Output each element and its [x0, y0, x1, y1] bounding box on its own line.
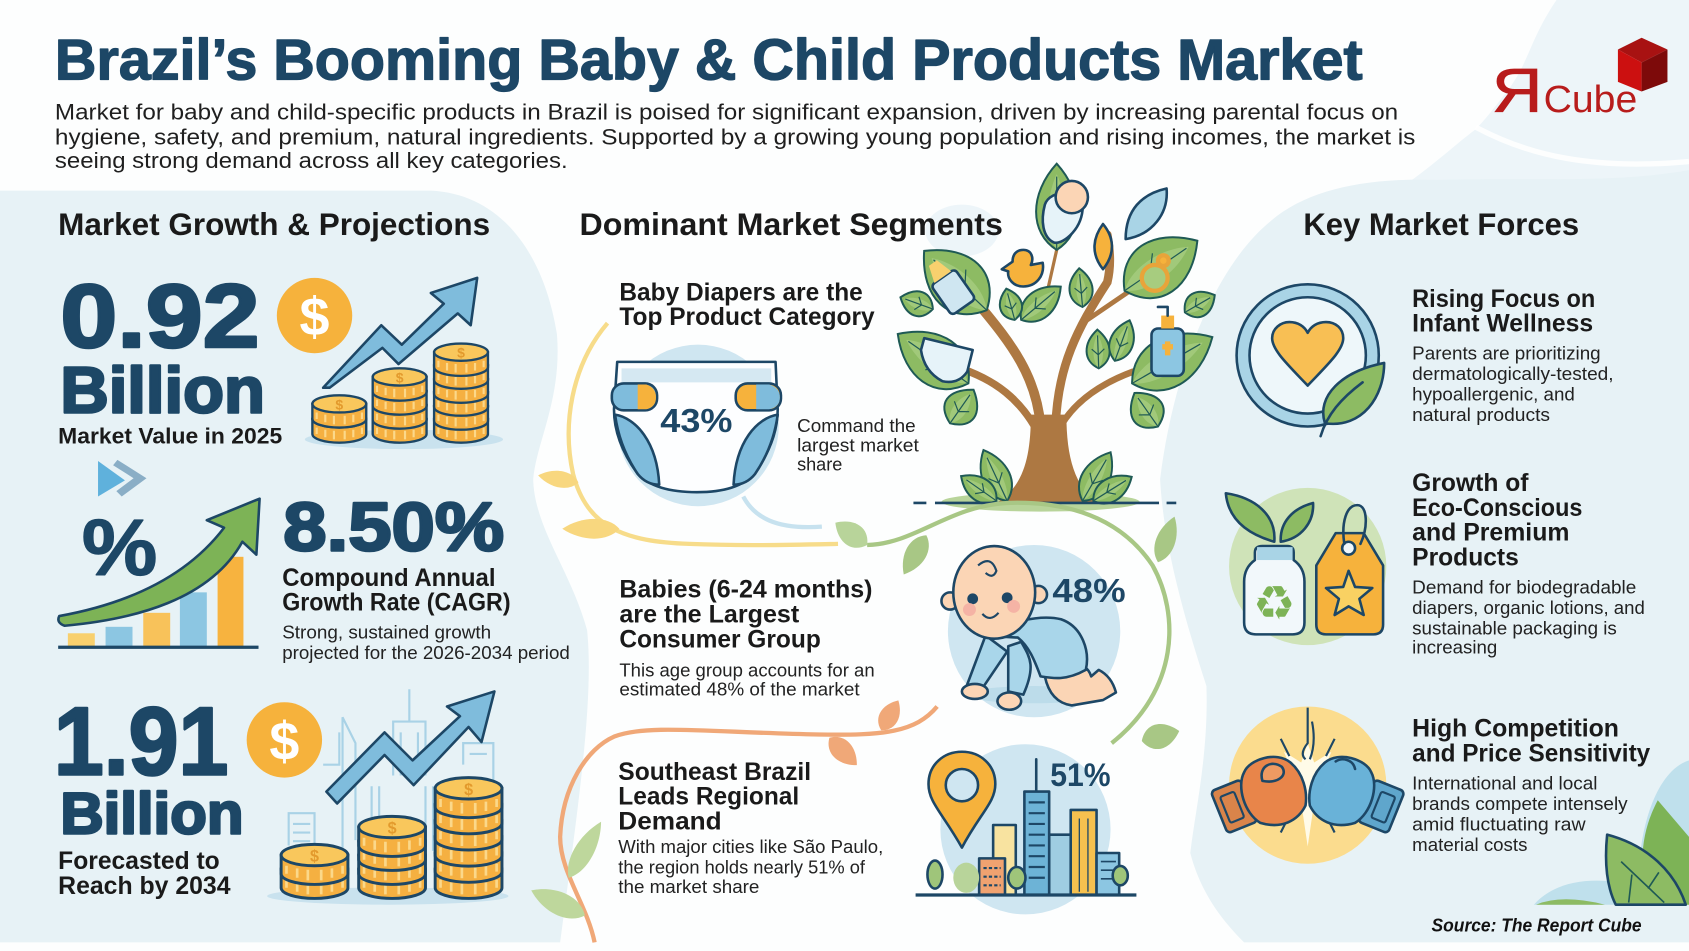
heading: dominant segments: Dominant Market Segments: [580, 207, 1003, 242]
panel: key market forces: [1211, 207, 1689, 905]
text: babies consumer group: are the Largest: [619, 602, 799, 629]
text: baby diapers: Baby Diapers are the: [619, 279, 863, 306]
icon: pacifier: [1142, 255, 1169, 291]
text: baby diapers: [619, 279, 920, 475]
text: eco conscious: sustainable packaging is: [1412, 617, 1617, 638]
stat: 1.91 billion: Forecasted to: [58, 848, 220, 875]
icon: diaper with 43 percent: [612, 345, 781, 506]
text: infant wellness: natural products: [1412, 404, 1550, 425]
text: infant wellness: Parents are prioritizing: [1412, 343, 1601, 364]
stat: CAGR: Strong, sustained growth: [282, 622, 491, 643]
icon: dollar coin: $: [269, 711, 299, 771]
text: eco conscious: Eco-Conscious: [1412, 495, 1582, 522]
icon: small diaper: [921, 338, 973, 382]
panel: market growth and projections: [54, 207, 570, 905]
icon: diaper with 43 percent: 43%: [660, 403, 732, 440]
text: baby diapers: share: [797, 454, 842, 475]
text: babies consumer group: Babies (6-24 months): [619, 577, 873, 604]
text: baby diapers: Command the: [797, 415, 916, 436]
text: eco conscious: and Premium: [1412, 520, 1569, 547]
icon: city, rising arrow and large coin stacks: $: [464, 781, 473, 799]
background: right panel blob: [1160, 170, 1689, 942]
icon: rising arrow and coin stacks: $: [457, 345, 465, 361]
text: eco conscious: [1412, 470, 1645, 658]
intro paragraph: [55, 100, 1415, 173]
background: top right pale blob: [1400, 0, 1689, 188]
icon: city, rising arrow and large coin stacks: [267, 689, 508, 905]
text: infant wellness: Rising Focus on: [1412, 286, 1595, 313]
intro paragraph: hygiene, safety, and premium, natural ingredients. Supported by a growing young population and rising incomes, the market is: [55, 124, 1415, 149]
text: high competition: brands compete intensely: [1412, 793, 1628, 814]
icon: crawling baby with 48 percent: [941, 545, 1126, 717]
text: infant wellness: [1412, 286, 1614, 425]
icon: heart in ring with leaf: [1237, 284, 1384, 436]
text: baby diapers: Top Product Category: [619, 304, 875, 331]
icon: rubber duck: [1002, 250, 1043, 286]
corner foliage: [1534, 760, 1689, 905]
icon: eco bottle and price tag: [1226, 488, 1386, 645]
intro paragraph: seeing strong demand across all key categories.: [55, 148, 568, 173]
pale cloud behind tree: [925, 205, 999, 256]
ground mound: [941, 492, 1140, 512]
text: high competition: High Competition: [1412, 716, 1619, 743]
icon: dollar coin: [277, 278, 352, 353]
text: high competition: International and local: [1412, 772, 1597, 793]
text: eco conscious: Growth of: [1412, 470, 1529, 497]
icon: map pin and city with 51 percent: 51%: [1050, 757, 1111, 793]
stat: 0.92 billion: 0.92: [60, 266, 260, 367]
leaves: [884, 164, 1225, 511]
background: left panel blob: [0, 191, 589, 942]
intro paragraph: Market for baby and child-specific products in Brazil is poised for significant expansion, driven by increasing parental focus on: [55, 100, 1398, 125]
text: babies consumer group: This age group accounts for an: [619, 659, 875, 680]
text: infant wellness: hypoallergenic, and: [1412, 384, 1575, 405]
stat: 0.92 billion: Market Value in 2025: [58, 424, 282, 449]
text: southeast brazil: the region holds nearly 51% of: [618, 856, 866, 877]
icon: boxing gloves: [1211, 707, 1405, 864]
icon: city, rising arrow and large coin stacks: $: [388, 820, 397, 838]
icon: percent sign: %: [82, 503, 157, 592]
stat: CAGR: Compound Annual: [282, 565, 495, 592]
chart: CAGR growth bars with arrow: [58, 499, 260, 647]
panel: dominant market segments: [526, 164, 1225, 942]
text: eco conscious: Demand for biodegradable: [1412, 576, 1636, 597]
title: Brazil’s Booming Baby & Child Products Market: [55, 29, 1363, 93]
stat: 1.91 billion: Reach by 2034: [58, 873, 231, 900]
text: high competition: [1412, 716, 1650, 855]
icon: swaddled baby: [1043, 181, 1088, 243]
stat: CAGR: Growth Rate (CAGR): [282, 590, 511, 617]
text: infant wellness: dermatologically-tested,: [1412, 363, 1614, 384]
icon: double chevron: [98, 460, 146, 497]
text: babies consumer group: estimated 48% of the market: [619, 679, 860, 700]
logo: RCube: [1492, 38, 1667, 126]
text: eco conscious: diapers, organic lotions, and: [1412, 597, 1645, 618]
stat: 1.91 billion: Billion: [60, 782, 243, 847]
stat: 1.91 billion: [54, 686, 243, 900]
text: high competition: amid fluctuating raw: [1412, 813, 1586, 834]
icon: baby bottle: [921, 255, 976, 315]
tree trunk and branches: [969, 235, 1133, 503]
ground line: [913, 502, 1176, 504]
icon: eco bottle and price tag: ♻: [1253, 576, 1296, 631]
icon: rising arrow and coin stacks: $: [396, 369, 404, 385]
text: southeast brazil: With major cities like São Paulo,: [618, 836, 883, 857]
stat: 0.92 billion: Billion: [60, 354, 265, 426]
green vine: [829, 503, 1184, 753]
icon: crawling baby with 48 percent: 48%: [1052, 573, 1126, 610]
heading: market growth: Market Growth & Projections: [58, 207, 490, 242]
icon: map pin and city with 51 percent: [916, 744, 1136, 914]
text: babies consumer group: [619, 577, 875, 700]
stat: CAGR: [282, 488, 570, 663]
text: southeast brazil: Leads Regional: [618, 784, 799, 811]
icon: dollar coin: [247, 702, 322, 778]
logo: RCube: Cube: [1544, 78, 1637, 120]
stat: 0.92 billion: [58, 266, 282, 449]
yellow vine: [537, 323, 838, 545]
text: infant wellness: Infant Wellness: [1412, 311, 1593, 338]
orange vine: [526, 696, 937, 942]
text: southeast brazil: Southeast Brazil: [618, 759, 811, 786]
source note: Source: The Report Cube: [1432, 915, 1642, 936]
text: southeast brazil: the market share: [618, 876, 759, 897]
text: eco conscious: Products: [1412, 544, 1519, 571]
text: southeast brazil: [618, 759, 883, 897]
stat: CAGR: 8.50%: [283, 488, 504, 565]
logo: RCube: Я: [1492, 56, 1543, 126]
stat: CAGR: projected for the 2026-2034 period: [282, 642, 570, 663]
tree with baby products: [884, 164, 1225, 512]
icon: rising arrow and coin stacks: [305, 278, 503, 449]
icon: lotion pump bottle: [1151, 307, 1184, 376]
heading: key forces: Key Market Forces: [1303, 207, 1579, 242]
text: southeast brazil: Demand: [618, 808, 722, 835]
icon: dollar coin: $: [300, 287, 330, 347]
text: baby diapers: largest market: [797, 434, 920, 455]
text: babies consumer group: Consumer Group: [619, 626, 821, 653]
text: high competition: and Price Sensitivity: [1412, 740, 1650, 767]
icon: city, rising arrow and large coin stacks: $: [310, 848, 319, 866]
stat: 1.91 billion: 1.91: [54, 686, 228, 795]
text: high competition: material costs: [1412, 834, 1527, 855]
icon: rising arrow and coin stacks: $: [335, 396, 343, 412]
text: eco conscious: increasing: [1412, 637, 1497, 658]
